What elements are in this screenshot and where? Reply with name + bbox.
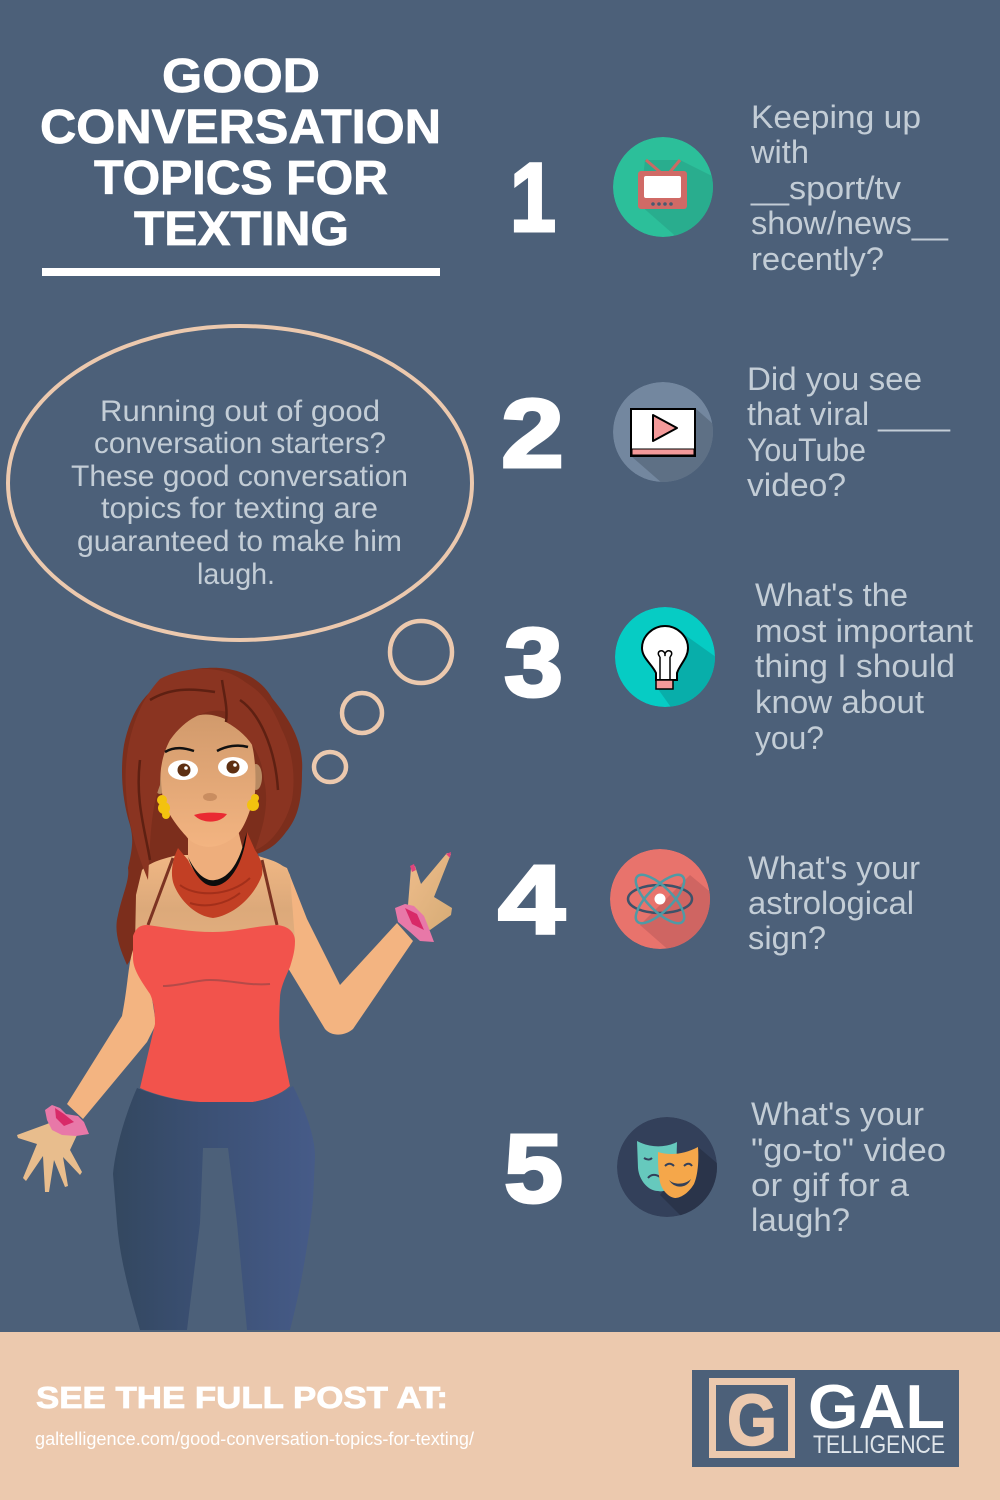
right scrunchie [395, 904, 434, 942]
neck [188, 830, 246, 885]
text: item 3: most important [755, 613, 973, 649]
logo: GAL [808, 1373, 945, 1442]
illustration: woman pointing [17, 668, 452, 1330]
logo [692, 1370, 959, 1467]
thought bubble with intro text: topics for texting are [101, 492, 378, 525]
text: item 1: show/news__ [751, 205, 949, 241]
lips [194, 813, 227, 822]
thought bubble with intro text: These good conversation [71, 460, 408, 493]
back hair [116, 668, 302, 965]
title [40, 50, 441, 276]
footer heading: SEE THE FULL POST AT: [36, 1380, 448, 1415]
earrings [157, 794, 259, 819]
text: item 3: What's the [755, 577, 908, 613]
left arm [67, 950, 156, 1119]
thought bubble with intro text: laugh. [197, 558, 275, 591]
thought bubble with intro text: Running out of good [100, 395, 380, 428]
icon: light bulb [615, 607, 715, 707]
left scrunchie [45, 1105, 89, 1136]
text: item 2: Did you see [747, 361, 922, 397]
icon: atom [610, 849, 710, 949]
text: item 5: "go-to" video [751, 1132, 946, 1168]
scarf [172, 832, 262, 918]
thought bubble with intro text [8, 326, 472, 640]
icon: video player [613, 382, 713, 482]
text: item 2: that viral ____ [747, 396, 951, 432]
text: item 5: laugh? [751, 1202, 850, 1238]
thought bubble with intro text: conversation starters? [94, 427, 386, 460]
text: item 3 [755, 577, 973, 756]
number 3: 3 [504, 608, 563, 717]
text: item 4: What's your [748, 850, 920, 886]
text: item 3: know about [755, 684, 924, 720]
thought bubble trail circles [314, 621, 452, 782]
eyes and brows [165, 746, 248, 780]
title: GOOD [162, 50, 320, 103]
number 2: 2 [501, 379, 564, 488]
number 5: 5 [504, 1114, 563, 1223]
text: item 1: recently? [751, 241, 884, 277]
title: TOPICS FOR [94, 152, 388, 205]
text: item 3: thing I should [755, 648, 955, 684]
text: item 4: sign? [748, 920, 826, 956]
icon: theatre masks [617, 1117, 717, 1217]
halter straps [148, 858, 277, 925]
text: item 3: you? [755, 720, 824, 756]
text: item 5 [751, 1096, 946, 1238]
footer url: galtelligence.com/good-conversation-topics-for-texting/ [35, 1429, 474, 1449]
logo: TELLIGENCE [813, 1431, 945, 1459]
nose [203, 793, 217, 801]
right hand [405, 853, 452, 930]
front hair strands [126, 669, 294, 880]
title: TEXTING [134, 203, 349, 256]
left hand [17, 1118, 82, 1192]
text: item 5: or gif for a [751, 1167, 909, 1203]
icon: television [613, 137, 720, 240]
text: item 1: Keeping up [751, 99, 921, 135]
text: item 2: video? [747, 467, 846, 503]
jeans [113, 1086, 315, 1330]
top [133, 925, 295, 1102]
thought bubble with intro text: guaranteed to make him [77, 525, 402, 558]
text: item 5: What's your [751, 1096, 924, 1132]
title: CONVERSATION [40, 101, 441, 154]
chest and shoulders [135, 855, 295, 945]
right arm [270, 860, 413, 1035]
text: item 2: YouTube [747, 432, 866, 468]
ears [153, 768, 167, 794]
text: item 4 [748, 850, 920, 956]
face [161, 714, 255, 847]
logo: G [727, 1381, 777, 1461]
number 1: 1 [510, 143, 556, 252]
text: item 2 [747, 361, 951, 503]
text: item 1 [750, 99, 949, 277]
text: item 4: astrological [748, 885, 914, 921]
footer band [0, 1332, 1000, 1500]
text: item 1: with [750, 134, 809, 170]
number 4: 4 [498, 845, 565, 954]
text: item 1: __sport/tv [750, 170, 901, 206]
